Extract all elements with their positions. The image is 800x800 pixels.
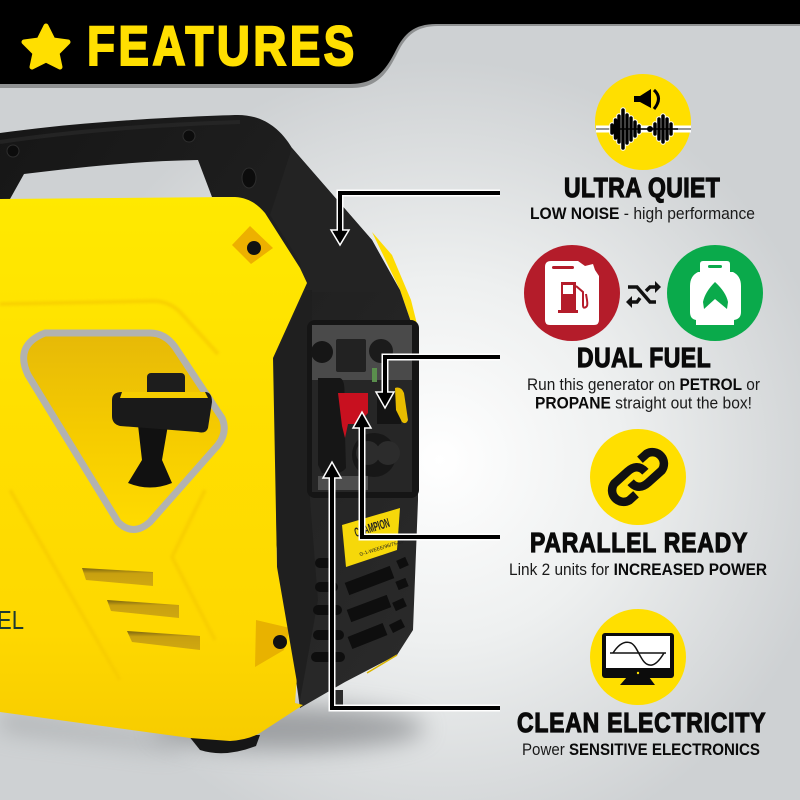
icon: propane tank — [667, 245, 763, 341]
icon: petrol can — [524, 245, 620, 341]
heading: DUAL FUEL — [577, 343, 711, 374]
ground shadow left — [0, 712, 190, 750]
recoil mount — [147, 373, 185, 397]
side grip facet — [274, 290, 318, 700]
socket cover — [318, 378, 346, 474]
text: Run this generator on PETROL or — [527, 375, 760, 394]
body embossed lines — [0, 301, 218, 680]
heading: ULTRA QUIET — [564, 173, 720, 204]
selector — [377, 392, 401, 424]
text: PROPANE straight out the box! — [535, 394, 752, 412]
generator — [0, 115, 425, 753]
icon: chain link — [590, 429, 686, 525]
text: LOW NOISE - high performance — [530, 204, 755, 223]
lower panel — [312, 380, 412, 492]
right knob — [369, 339, 393, 363]
header banner — [0, 0, 800, 88]
icon: star — [24, 26, 68, 67]
arrow: clean electricity — [323, 462, 500, 708]
arrow: parallel ready — [353, 412, 500, 537]
display module — [336, 339, 366, 372]
grille slots — [316, 561, 407, 657]
model label: CHAMPION — [352, 515, 391, 540]
red fuel switch — [338, 393, 368, 438]
recoil grip — [112, 392, 212, 432]
panel: parallel ready — [509, 429, 767, 579]
panel: ultra quiet — [530, 74, 755, 223]
handle highlight — [0, 122, 240, 142]
yellow housing edge — [367, 655, 397, 673]
handle screws — [7, 130, 256, 188]
black housing and handle — [0, 115, 418, 708]
green board detail — [372, 368, 377, 382]
outlets — [352, 433, 396, 477]
heading: PARALLEL READY — [530, 528, 747, 559]
yellow tag — [395, 388, 408, 423]
model label — [342, 508, 405, 567]
yellow side strip — [372, 232, 419, 332]
icon: monitor sine wave — [590, 609, 686, 705]
arrow: ultra quiet — [331, 193, 500, 245]
panel: dual fuel — [524, 245, 763, 412]
upper screw recess — [232, 226, 273, 264]
rear foot — [335, 690, 343, 705]
lower screw recess — [255, 620, 290, 667]
text: Link 2 units for INCREASED POWER — [509, 560, 767, 579]
top cap facet — [270, 148, 400, 292]
grip yellow insert — [120, 392, 208, 398]
rubber foot — [188, 735, 260, 753]
vents — [82, 568, 200, 650]
icon: sound wave — [595, 74, 691, 170]
panel: clean electricity — [517, 609, 765, 759]
model label: G-1-WEEE/96/75-EF — [359, 539, 405, 558]
control panel — [307, 320, 419, 498]
recoil stem — [128, 425, 172, 488]
ground shadow — [155, 706, 425, 750]
text: Power SENSITIVE ELECTRONICS — [522, 740, 760, 759]
yellow body — [0, 197, 307, 741]
title: FEATURES — [87, 15, 354, 77]
arrow: dual fuel — [376, 357, 500, 408]
left knob — [311, 341, 333, 363]
lower grey band — [318, 476, 368, 490]
heading: CLEAN ELECTRICITY — [517, 708, 765, 739]
triangular handle window — [24, 333, 224, 530]
icon: swap arrows — [626, 281, 661, 308]
